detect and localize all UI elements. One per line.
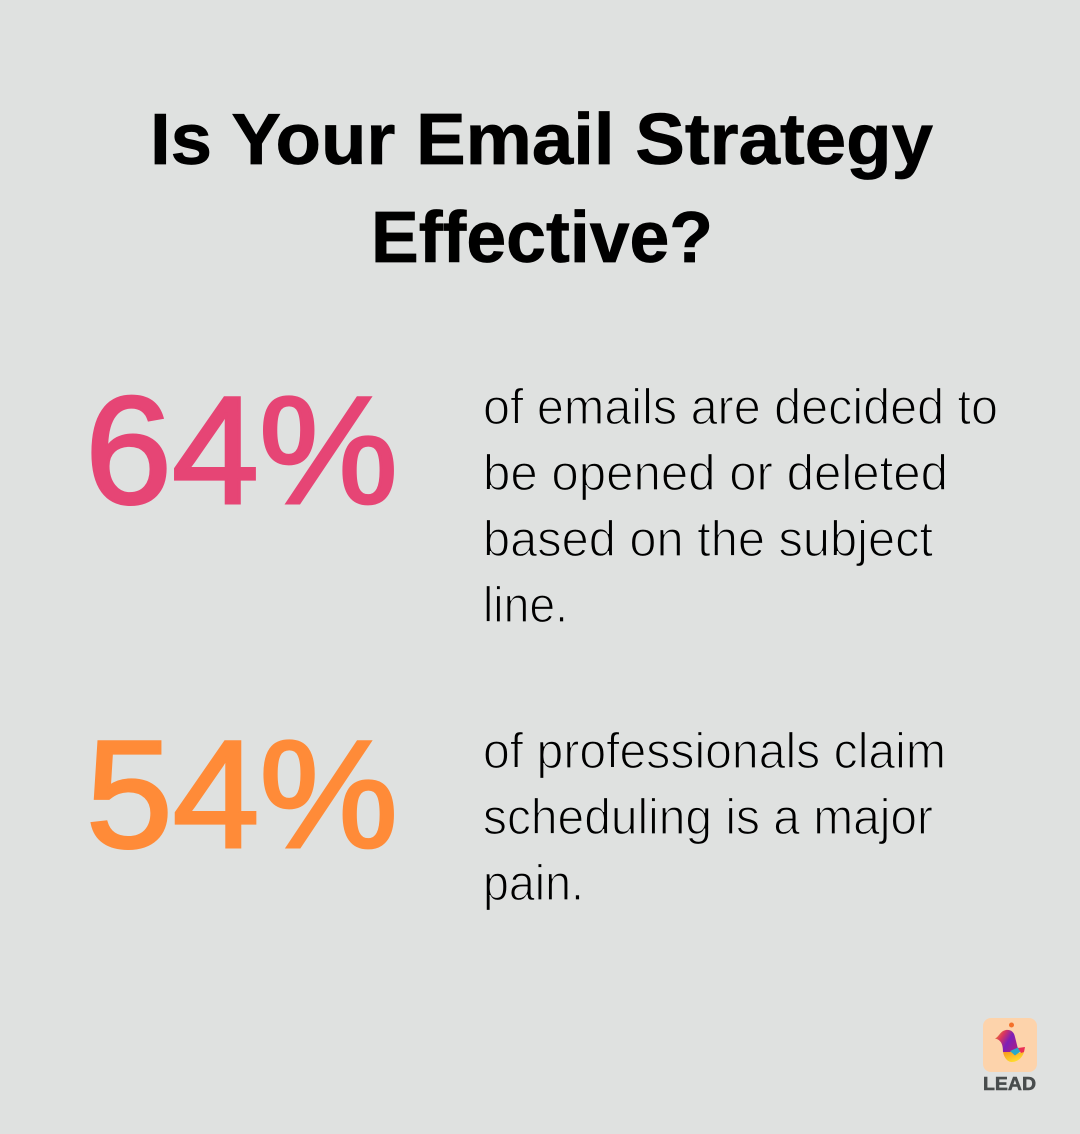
logo: LEAD [983,1018,1037,1094]
title: Effective? [371,198,713,278]
logo tile [983,1018,1037,1072]
stat text: scheduling: pain. [483,855,584,911]
title [150,100,933,278]
stat: 54% [86,709,946,911]
stat text: scheduling: scheduling is a major [483,789,933,845]
stat text: subject line: line. [483,577,568,633]
logo wordmark: LEAD [983,1074,1036,1094]
stat text: scheduling: of professionals claim [483,723,946,779]
icon: bird [995,1022,1025,1062]
stat number: 64%: 64% [85,365,398,536]
stat text: scheduling [483,723,946,911]
stat text: subject line: be opened or deleted [483,445,948,501]
title: Is Your Email Strategy [150,100,933,180]
stat text: subject line [483,379,998,633]
stat number: 54%: 54% [86,709,398,880]
stat text: subject line: based on the subject [483,511,933,567]
stat: 64% [85,365,998,633]
stat text: subject line: of emails are decided to [483,379,998,435]
